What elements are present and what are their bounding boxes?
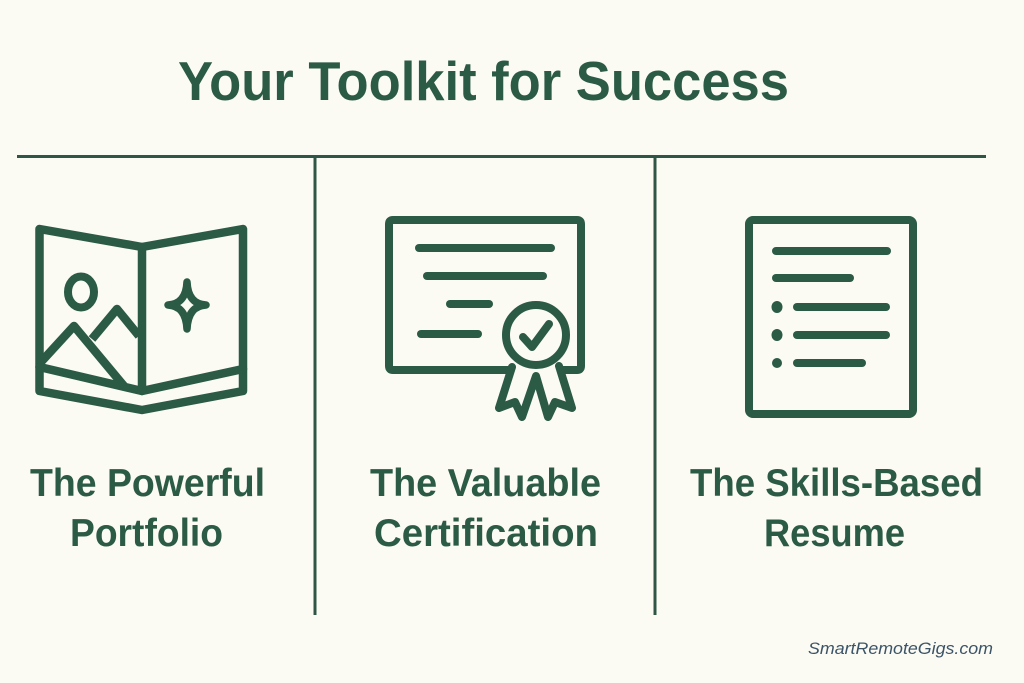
label: The Powerful Portfolio — [30, 462, 265, 555]
label: The Valuable Certification: The Valuable — [370, 462, 601, 505]
label: The Valuable Certification: Certification — [374, 512, 598, 555]
icon: certificate with ribbon seal — [389, 220, 581, 417]
panel: resume — [690, 220, 983, 555]
footer: website credit: SmartRemoteGigs.com — [808, 639, 993, 658]
icon: resume document — [749, 220, 913, 414]
label: The Skills-Based Resume: The Skills-Based — [690, 462, 983, 505]
panel: certification — [370, 220, 601, 555]
label: The Powerful Portfolio: The Powerful — [30, 462, 265, 505]
label: The Powerful Portfolio: Portfolio — [70, 512, 223, 555]
panel: portfolio — [30, 229, 265, 555]
icon: open portfolio book — [40, 229, 243, 410]
label: The Valuable Certification — [370, 462, 601, 555]
label: The Skills-Based Resume: Resume — [764, 512, 905, 555]
title: Your Toolkit for Success — [178, 50, 789, 112]
label: The Skills-Based Resume — [690, 462, 983, 555]
